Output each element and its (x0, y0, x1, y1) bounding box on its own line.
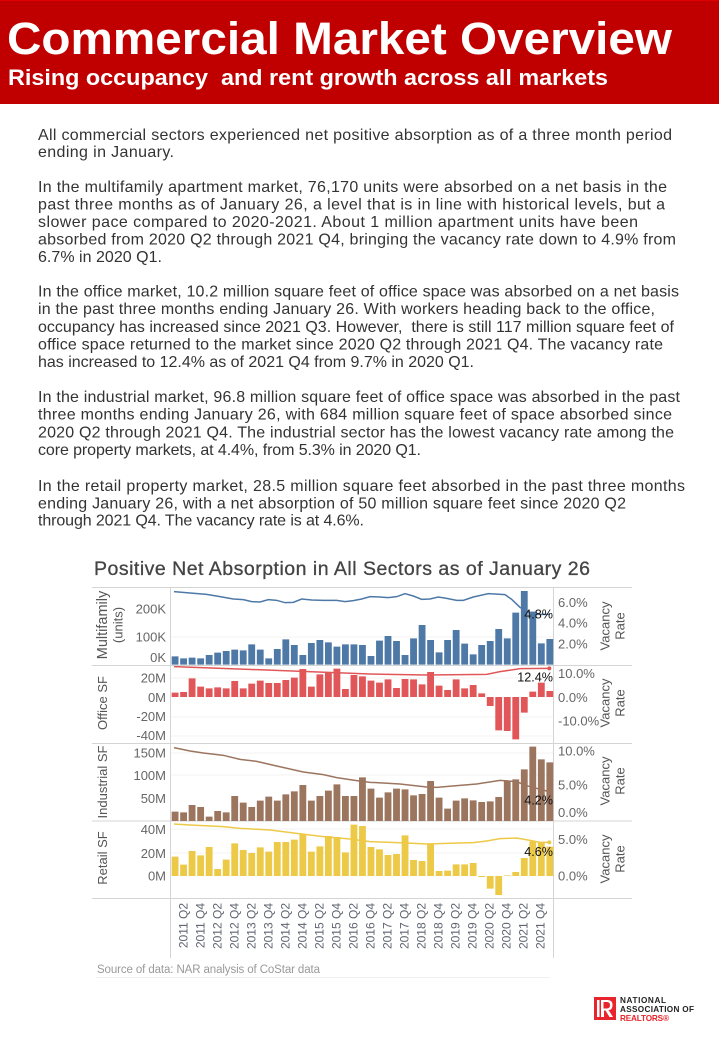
x axis quarter labels: 2021 Q2 (516, 903, 530, 949)
right axis titles: Vacancy (598, 834, 612, 883)
lower panels: industrial and retail (172, 747, 553, 895)
left axis titles: Multifamily (95, 590, 111, 659)
right axis tick labels: 0.0% (558, 868, 588, 884)
paragraph: office: in the past three months ending January 26. With workers heading back to the office, (38, 301, 655, 318)
x axis quarter labels: 2016 Q2 (346, 903, 360, 949)
x axis quarter labels: 2012 Q2 (210, 903, 224, 949)
chart: positive net absorption (92, 558, 632, 978)
upper panels: multifamily and office (172, 591, 553, 739)
left axis tick labels: 200K (136, 602, 166, 616)
x axis quarter labels: 2012 Q4 (228, 903, 242, 949)
paragraph: industrial: In the industrial market, 96.8 million square feet of office space was absorbed in the past (38, 389, 681, 406)
subtitle: Rising occupancy and rent growth across all markets (8, 65, 608, 90)
office bars (172, 669, 553, 739)
paragraph: retail: ending January 26, with a net absorption of 50 million square feet since 2020 Q2 (38, 496, 626, 512)
left axis tick labels: 150M (133, 746, 166, 760)
x axis quarter labels: 2011 Q4 (194, 903, 208, 948)
left axis tick labels: 0M (148, 868, 166, 884)
right axis tick labels: 0.0% (558, 805, 588, 820)
latest vacancy annotations (517, 608, 553, 859)
title: Commercial Market Overview (7, 13, 673, 64)
left axis tick labels: 20M (141, 846, 166, 861)
paragraph: multifamily: In the multifamily apartment market, 76,170 units were absorbed on a net basis in the (38, 179, 667, 196)
left axis tick labels (133, 602, 166, 884)
right axis tick labels: 10.0% (558, 666, 595, 681)
retail bars (172, 825, 553, 895)
left axis tick labels: 100K (136, 630, 166, 644)
paragraph: office: office space returned to the market since 2020 Q2 through 2021 Q4. The vacancy rate (38, 336, 663, 354)
right axis tick labels: 6.0% (558, 595, 588, 610)
right axis tick labels: 2.0% (558, 636, 588, 652)
left axis titles: Industrial SF (95, 745, 110, 818)
multifamily bars (172, 591, 553, 665)
left axis titles: Office SF (95, 676, 110, 730)
paragraph: office: occupancy has increased since 2021 Q3. However, there is still 117 million square feet of (38, 319, 675, 336)
left axis tick labels: -20M (136, 709, 166, 724)
paragraph: office: In the office market, 10.2 million square feet of office space was absorbed on a net basis (38, 284, 679, 300)
left axis tick labels: 100M (133, 768, 166, 783)
paragraph: multifamily: past three months as of January 26, a level that is in line with historical levels, but a (38, 196, 665, 214)
paragraph: retail: through 2021 Q4. The vacancy rate is at 4.6%. (38, 512, 364, 530)
left axis tick labels: 50M (141, 791, 166, 806)
right axis tick labels: 4.0% (558, 616, 588, 630)
right axis tick labels: 10.0% (558, 744, 595, 758)
paragraph: industrial (38, 389, 681, 459)
paragraph: office: has increased to 12.4% as of 2021 Q4 from 9.7% in 2020 Q1. (38, 354, 474, 371)
x axis quarter labels: 2018 Q2 (414, 903, 428, 949)
multifamily vacancy line (174, 592, 550, 614)
x axis quarter labels: 2017 Q4 (398, 903, 412, 949)
header banner (0, 0, 719, 104)
industrial vacancy line (174, 748, 547, 791)
paragraph: multifamily: 6.7% in 2020 Q1. (38, 249, 162, 266)
logo wordmark: REALTORS® (620, 1014, 669, 1023)
paragraph: multifamily: absorbed from 2020 Q2 through 2021 Q4, bringing the vacancy rate down to 4.9% from (38, 232, 676, 248)
left axis tick labels: 0M (148, 690, 166, 705)
paragraph: industrial: three months ending January 26, with 684 million square feet of space absorbed since (38, 406, 672, 424)
right axis titles: Vacancy (598, 601, 612, 650)
right axis titles: Rate (612, 689, 628, 717)
paragraph: retail (38, 478, 685, 530)
x axis quarter labels: 2018 Q4 (432, 903, 446, 949)
chart title: Positive Net Absorption in All Sectors as of January 26 (94, 558, 590, 580)
x axis quarter labels: 2019 Q2 (448, 903, 462, 949)
x axis quarter labels: 2013 Q2 (244, 903, 258, 949)
latest vacancy annotations: 12.4% (517, 671, 553, 685)
right axis tick labels: 5.0% (558, 778, 588, 792)
x axis quarter labels: 2014 Q4 (296, 903, 310, 949)
paragraph: multifamily: slower pace compared to 2020-2021. About 1 million apartment units have been (38, 214, 638, 231)
x axis quarter labels: 2019 Q4 (466, 903, 480, 949)
x axis quarter labels: 2020 Q4 (500, 903, 514, 949)
left axis tick labels: 40M (141, 822, 166, 837)
right axis titles: Rate (612, 845, 628, 873)
left axis titles: Retail SF (95, 831, 110, 885)
right axis titles: Rate (612, 612, 628, 640)
right axis titles: Vacancy (598, 756, 612, 805)
left axis tick labels: -40M (136, 728, 166, 743)
x axis quarter labels: 2014 Q2 (278, 903, 292, 949)
paragraph: intro: ending in January. (38, 144, 174, 161)
paragraph: industrial: 2020 Q2 through 2021 Q4. The industrial sector has the lowest vacancy rate among the (38, 424, 674, 442)
latest vacancy annotations: 4.6% (524, 845, 553, 859)
icon: R mark (594, 997, 616, 1020)
right axis tick labels: -10.0% (558, 714, 600, 728)
paragraph: intro: All commercial sectors experienced net positive absorption as of a three month period (38, 127, 672, 144)
x axis quarter labels (176, 903, 548, 949)
paragraph: retail: In the retail property market, 28.5 million square feet absorbed in the past three months (38, 478, 685, 495)
x axis quarter labels: 2013 Q4 (262, 903, 276, 949)
logo: National Association of Realtors (594, 996, 694, 1023)
paragraph: intro (38, 127, 672, 161)
right axis tick labels: 0.0% (558, 690, 588, 705)
x axis quarter labels: 2016 Q4 (364, 903, 378, 949)
x axis quarter labels: 2021 Q4 (534, 903, 548, 949)
right axis titles: Rate (612, 767, 628, 795)
right axis tick labels: 5.0% (558, 832, 588, 847)
x axis quarter labels: 2015 Q2 (312, 903, 326, 949)
paragraph: multifamily (38, 179, 676, 266)
left axis titles (95, 590, 126, 885)
office vacancy line (174, 666, 551, 675)
left axis tick labels: 20M (141, 670, 166, 686)
source note: Source of data: NAR analysis of CoStar data (97, 964, 321, 976)
left axis titles: (units) (110, 607, 126, 643)
logo wordmark: ASSOCIATION OF (620, 1005, 694, 1014)
right axis titles (598, 601, 628, 883)
retail vacancy line (174, 824, 551, 844)
x axis quarter labels: 2011 Q2 (176, 903, 190, 948)
logo wordmark: NATIONAL (620, 996, 666, 1005)
body text (38, 127, 685, 530)
right axis tick labels (558, 595, 600, 884)
paragraph: office (38, 284, 679, 371)
x axis quarter labels: 2017 Q2 (380, 903, 394, 949)
latest vacancy annotations: 4.2% (524, 794, 553, 808)
x axis quarter labels: 2015 Q4 (330, 903, 344, 949)
latest vacancy annotations: 4.8% (524, 608, 553, 622)
right axis titles: Vacancy (598, 678, 612, 727)
industrial bars (172, 747, 553, 821)
left axis tick labels: 0K (150, 650, 166, 665)
x axis quarter labels: 2020 Q2 (482, 903, 496, 949)
logo wordmark (620, 996, 694, 1023)
paragraph: industrial: core property markets, at 4.4%, from 5.3% in 2020 Q1. (38, 442, 421, 459)
